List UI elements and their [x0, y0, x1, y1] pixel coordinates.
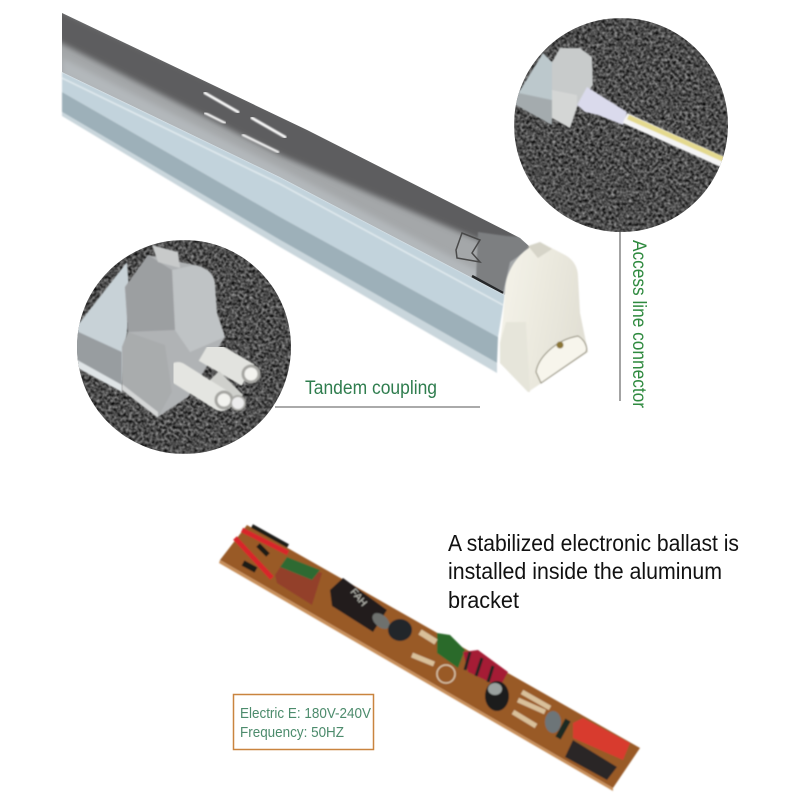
red wires [235, 526, 288, 578]
electronic ballast circuit board [219, 525, 640, 791]
tandem coupling leader line [275, 406, 480, 408]
small components [388, 619, 568, 738]
electric range: Electric E: 180V-240V [240, 705, 371, 722]
electrolytic capacitor: FAH [348, 587, 369, 609]
label: tandem coupling: Tandem coupling [305, 378, 437, 399]
carpet background [77, 240, 292, 454]
power plug and cable [577, 87, 725, 163]
aluminum bracket end [77, 262, 130, 392]
line 1: A stabilized electronic ballast is [448, 530, 739, 556]
film capacitors [275, 557, 465, 668]
panel: access line connector detail [514, 18, 729, 233]
line 3: bracket [448, 587, 520, 613]
access connector leader line [619, 232, 621, 401]
electrolytic capacitor [330, 578, 393, 632]
carpet background [514, 18, 729, 233]
panel: tandem coupling detail [70, 240, 292, 454]
frequency: Frequency: 50HZ [240, 724, 344, 741]
label: access line connector: Access line connector [628, 240, 649, 409]
capacitor [485, 681, 509, 711]
ballast description [448, 530, 739, 613]
toroid coil [463, 650, 508, 687]
end cap [500, 242, 588, 392]
UV lamp tube [50, 5, 535, 305]
transformer [565, 718, 630, 780]
callout: electrical specs [234, 694, 374, 750]
lamp fixture [50, 5, 588, 392]
bracket and socket [514, 48, 593, 128]
line 2: installed inside the aluminum [448, 558, 722, 584]
connector body [122, 245, 225, 418]
coupling tubes [178, 350, 259, 410]
aluminum bracket [62, 72, 505, 373]
board [220, 525, 640, 788]
